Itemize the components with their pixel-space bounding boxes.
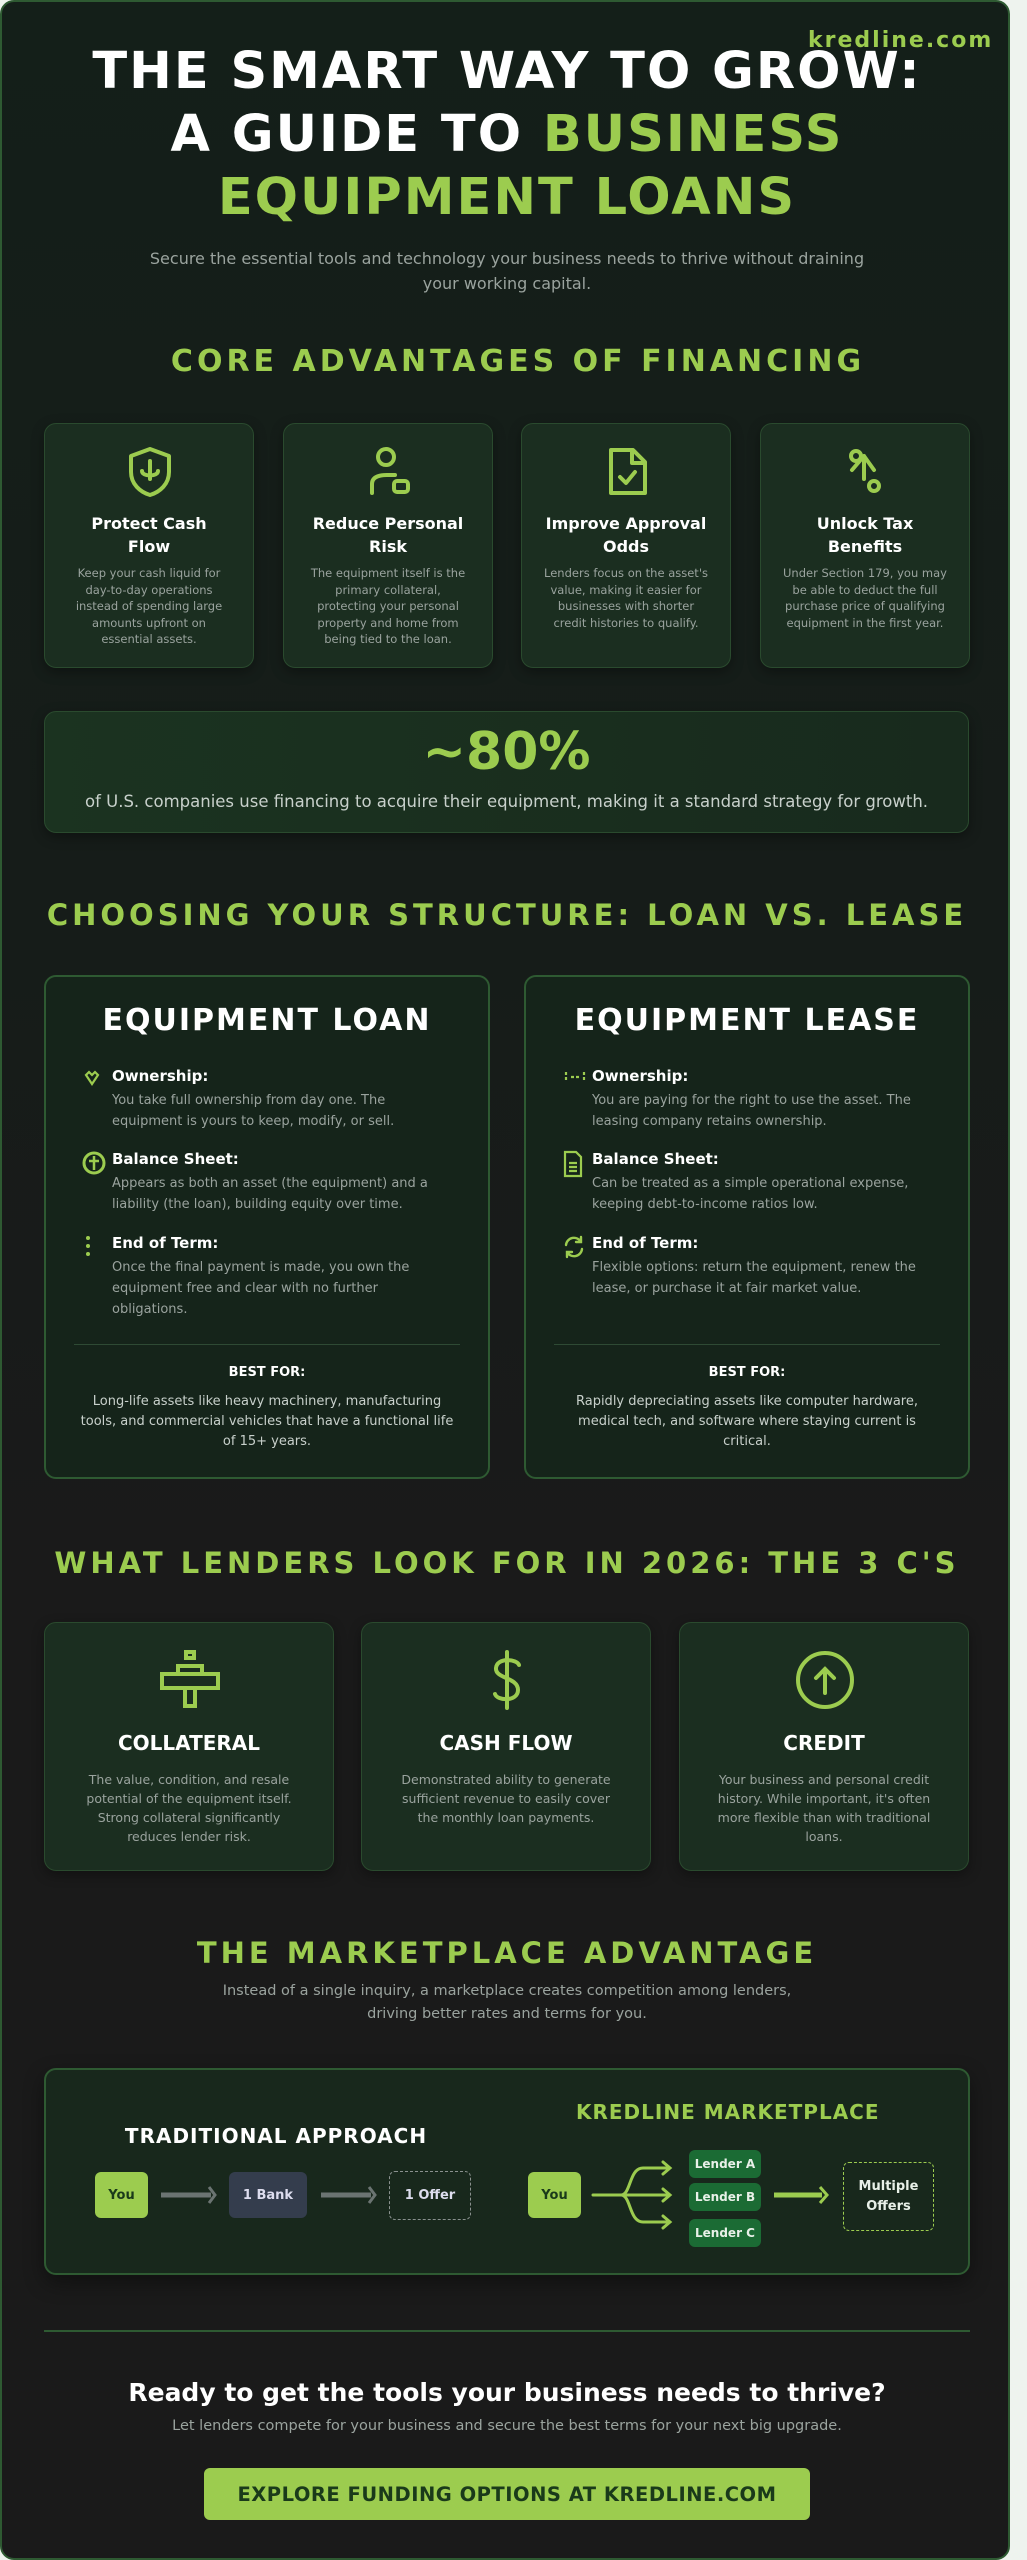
panel: equipment lease: EQUIPMENT LEASE: [575, 1003, 919, 1038]
item: ownership: Ownership:: [112, 1067, 208, 1085]
item: ownership: You take full ownership from day one. The equipment is yours to keep, modify, or sell.: [112, 1093, 394, 1129]
card: protect cash flow: Flow: [128, 537, 170, 556]
kredline marketplace: [528, 2100, 934, 2247]
item: ownership: You are paying for the right to use the asset. The leasing company retains ownership.: [592, 1093, 911, 1129]
kredline marketplace: Lender B: [695, 2190, 755, 2204]
card: cash flow: [361, 1622, 651, 1871]
item: balance sheet: [564, 1150, 908, 1212]
title: THE SMART WAY TO GROW:: [92, 42, 922, 101]
icon: circle up arrow: [796, 1651, 854, 1709]
kredline marketplace: KREDLINE MARKETPLACE: [576, 2100, 880, 2124]
title: EQUIPMENT LOANS: [218, 168, 796, 227]
heading: loan vs lease: CHOOSING YOUR STRUCTURE: LOAN VS. LEASE: [47, 898, 967, 932]
traditional approach: 1 Offer: [405, 2188, 455, 2203]
item: end of term: Once the final payment is made, you own the equipment free and clear with no further obligations.: [112, 1260, 409, 1317]
item: balance sheet: Balance Sheet:: [592, 1150, 719, 1168]
item: balance sheet: Can be treated as a simple operational expense, keeping debt-to-income ratios low.: [592, 1176, 908, 1212]
card: unlock tax benefits: Benefits: [828, 537, 902, 556]
traditional approach: You: [108, 2188, 135, 2202]
heading: marketplace advantage: THE MARKETPLACE ADVANTAGE: [197, 1936, 817, 1970]
icon: person with lock: [370, 447, 410, 495]
best for: loan: BEST FOR:: [229, 1365, 305, 1380]
item: balance sheet: Balance Sheet:: [112, 1150, 239, 1168]
traditional approach: TRADITIONAL APPROACH: [125, 2124, 427, 2148]
card: improve approval odds: Lenders focus on the asset's value, making it easier for businesses with shorter credit histories to qualify.: [544, 566, 708, 630]
title: [92, 42, 922, 227]
card: credit: CREDIT: [783, 1731, 865, 1755]
card: cash flow: Demonstrated ability to generate sufficient revenue to easily cover the monthly loan payments.: [401, 1772, 611, 1825]
stat callout: 80%: [44, 711, 969, 833]
icon: dollar: [492, 1650, 521, 1710]
card: collateral: The value, condition, and resale potential of the equipment itself. Strong collateral significantly reduces lender risk.: [86, 1772, 292, 1844]
item: ownership: [84, 1067, 394, 1129]
card: unlock tax benefits: [760, 423, 970, 668]
stat callout: 80%: of U.S. companies use financing to acquire their equipment, making it a standard strategy for growth.: [85, 792, 928, 811]
card: protect cash flow: Keep your cash liquid for day-to-day operations instead of spending large amounts upfront on essential assets.: [76, 566, 222, 646]
icon: percent arrow: [849, 449, 881, 493]
best for: lease: Rapidly depreciating assets like computer hardware, medical tech, and software where staying current is critical.: [576, 1394, 918, 1449]
icon: collateral: [160, 1650, 220, 1708]
item: end of term: End of Term:: [112, 1234, 218, 1252]
item: balance sheet: [82, 1150, 428, 1212]
card: unlock tax benefits: Unlock Tax: [817, 514, 913, 533]
kredline marketplace: Lender C: [695, 2226, 755, 2240]
card: cash flow: CASH FLOW: [439, 1731, 573, 1755]
best for: lease: [576, 1365, 918, 1449]
heading: 3 Cs: WHAT LENDERS LOOK FOR IN 2026: THE 3 C'S: [54, 1546, 960, 1580]
marketplace subtitle: Instead of a single inquiry, a marketplace creates competition among lenders, driving better rates and terms for you.: [223, 1983, 791, 2022]
traditional approach: [95, 2124, 471, 2220]
best for: loan: [80, 1365, 453, 1449]
subtitle: Secure the essential tools and technology your business needs to thrive without draining your working capital.: [150, 249, 864, 293]
card: reduce personal risk: Risk: [369, 537, 407, 556]
stat callout: 80%: ~80%: [422, 722, 591, 782]
card: reduce personal risk: The equipment itself is the primary collateral, protecting your personal property and home from being tied to the loan.: [311, 566, 465, 646]
item: end of term: End of Term:: [592, 1234, 698, 1252]
best for: lease: BEST FOR:: [709, 1365, 785, 1380]
item: end of term: [86, 1234, 409, 1317]
card: collateral: COLLATERAL: [118, 1731, 260, 1755]
item: ownership: [564, 1067, 911, 1129]
item: balance sheet: Appears as both an asset (the equipment) and a liability (the loan), building equity over time.: [112, 1176, 428, 1212]
item: end of term: [564, 1234, 916, 1296]
card: improve approval odds: [521, 423, 731, 668]
card: improve approval odds: Improve Approval: [546, 514, 706, 533]
card: credit: Your business and personal credit history. While important, it's often more flexible than with traditional loans.: [718, 1772, 930, 1844]
heading: core advantages: CORE ADVANTAGES OF FINANCING: [171, 344, 865, 379]
kredline marketplace: Offers: [866, 2198, 911, 2214]
card: protect cash flow: [44, 423, 254, 668]
item: ownership: Ownership:: [592, 1067, 688, 1085]
best for: loan: Long-life assets like heavy machinery, manufacturing tools, and commercial vehicles that have a functional life of 15+ years.: [81, 1394, 453, 1449]
kredline marketplace: Lender A: [695, 2157, 755, 2171]
card: credit: [679, 1622, 969, 1871]
icon: document check: [609, 448, 647, 495]
brand: kredline.com: kredline.com: [808, 28, 993, 53]
panel: equipment lease: [524, 975, 970, 1479]
card: collateral: [44, 1622, 334, 1871]
cta button: EXPLORE FUNDING OPTIONS AT KREDLINE.COM: [237, 2482, 777, 2506]
panel: equipment loan: [44, 975, 490, 1479]
icon: shield: [129, 447, 171, 497]
kredline marketplace: Multiple: [859, 2178, 918, 2194]
panel: equipment loan: EQUIPMENT LOAN: [103, 1003, 431, 1038]
card: reduce personal risk: Reduce Personal: [313, 514, 463, 533]
card: improve approval odds: Odds: [603, 537, 649, 556]
cta subtitle: Let lenders compete for your business and secure the best terms for your next big upgrade.: [172, 2418, 842, 2434]
card: reduce personal risk: [283, 423, 493, 668]
cta heading: Ready to get the tools your business needs to thrive?: [128, 2378, 886, 2407]
title: A GUIDE TO BUSINESS: [170, 105, 844, 164]
cta button: [204, 2468, 810, 2520]
traditional approach: 1 Bank: [243, 2188, 293, 2202]
kredline marketplace: You: [541, 2188, 568, 2202]
item: end of term: Flexible options: return the equipment, renew the lease, or purchase it at fair market value.: [592, 1260, 916, 1296]
panel: marketplace comparison: [44, 2068, 970, 2275]
card: protect cash flow: Protect Cash: [91, 514, 207, 533]
card: unlock tax benefits: Under Section 179, you may be able to deduct the full purchase price of qualifying equipment in the first year.: [783, 566, 947, 630]
